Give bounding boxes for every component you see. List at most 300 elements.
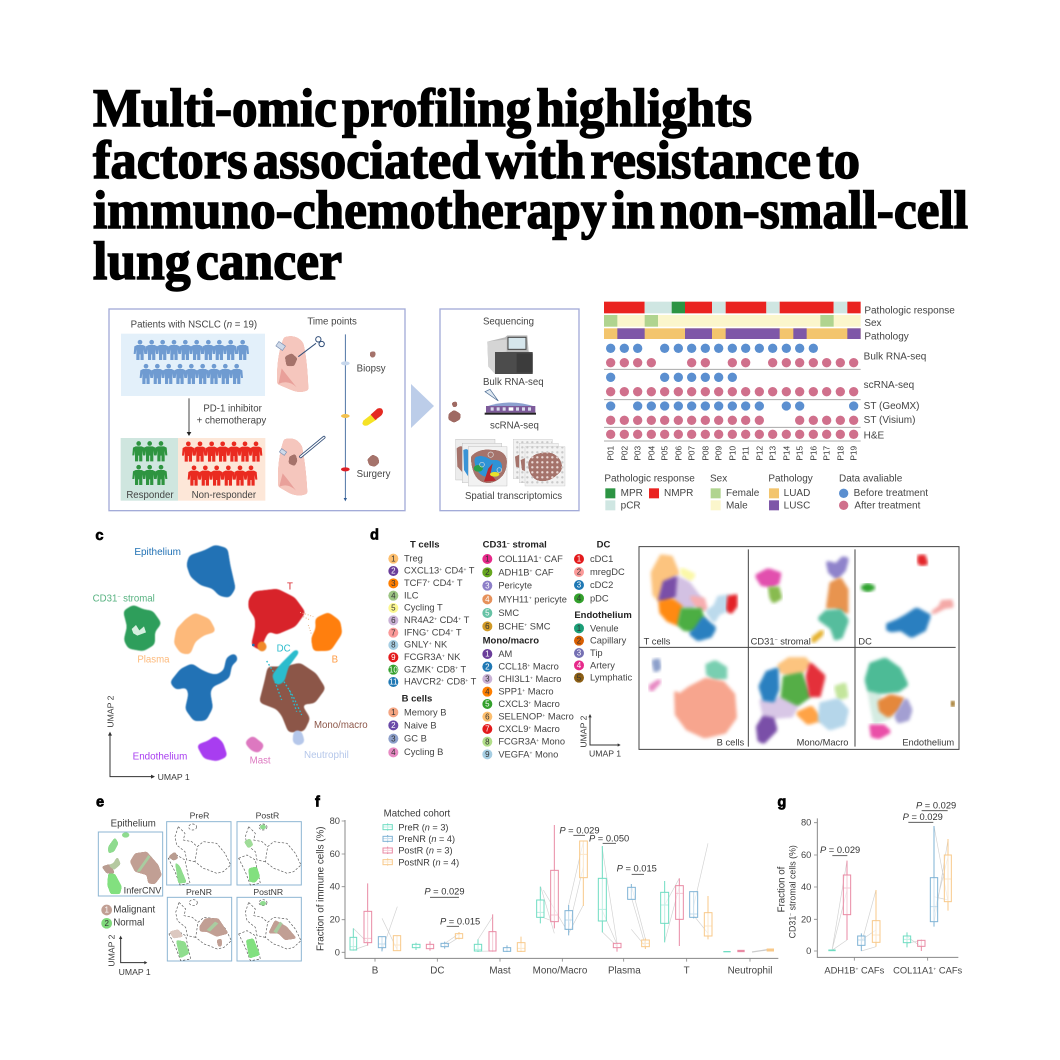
subpanel: CD31- stromal (751, 558, 847, 647)
legend: T cells: CXCL13 (404, 566, 439, 576)
subpanel: epithelium: Epithelium (111, 819, 156, 830)
cluster: CD31- stromal (93, 593, 161, 651)
legend: T cells: NR4A2 (404, 615, 434, 625)
row: sex: Sex (864, 318, 882, 329)
legend: B cells: 3 (391, 734, 396, 743)
legend: T cells: + (431, 666, 434, 672)
cluster: CD31- stromal: CD31 (93, 593, 117, 604)
patient labels: P19 (849, 445, 859, 461)
legend: mono/macro: CHI3L1 (498, 674, 530, 684)
subpanel: DC: DC (858, 637, 872, 647)
legend: T cells: T (468, 677, 477, 687)
biopsy sample: Biopsy (357, 364, 386, 375)
subpanel: PreR (167, 811, 231, 885)
legend: endothelium: Lymphatic (590, 673, 633, 683)
legend: DC (574, 540, 625, 603)
legend: B cells: 1 (391, 708, 396, 717)
legend: mono/macro: 8 (485, 737, 490, 746)
panel d: cell subtype legends (370, 527, 633, 759)
legend: B cells: GC B (404, 734, 427, 744)
legend: mono/macro: Mono (539, 737, 565, 747)
row: sex (604, 315, 882, 329)
axes: + (933, 967, 936, 973)
legend: T cells: FCGR3A (404, 652, 442, 662)
legend: CD31- stromal: ADH1B (498, 567, 529, 577)
row: ST GeoMX dots (606, 401, 920, 412)
axes: + (855, 967, 858, 973)
P values: P = 0.029 (903, 812, 943, 822)
legend: pathologic response: pCR (621, 500, 641, 511)
legend: endothelium: Venule (590, 623, 619, 633)
panel f: immune cell fractions (315, 795, 778, 976)
text: time points: Time points (307, 317, 357, 328)
legend: T cells: T (458, 664, 466, 674)
cluster: mono/macro (259, 663, 368, 732)
non-responder group: Non-responder (192, 490, 257, 501)
grid frame (639, 547, 959, 749)
legend: inferCNV (101, 905, 156, 929)
cluster: T (249, 582, 313, 652)
legend: mono/macro: + (528, 725, 531, 731)
cluster: DC: DC (277, 643, 291, 654)
P values: P = 0.029 (424, 887, 465, 897)
legend: mono/macro: Macro (530, 662, 559, 672)
axes: 20 (801, 914, 811, 924)
legend: CD31- stromal: + (539, 555, 542, 561)
icon: lung surgery (278, 437, 324, 495)
legend: pathology (768, 473, 813, 511)
subpanel: epithelium: InferCNV (124, 885, 162, 895)
cluster: plasma (137, 613, 216, 666)
cluster: CD31- stromal: stromal (120, 593, 155, 604)
legend: mono/macro: 5 (485, 700, 490, 709)
legend: mono/macro: CXCL3 (498, 699, 528, 709)
panel letter g: g (777, 795, 786, 811)
P values: P = 0.029 (916, 800, 956, 810)
legend: endothelium: 1 (577, 624, 582, 633)
legend: T cells: + (452, 579, 455, 585)
legend: T cells: + (429, 641, 432, 647)
legend: CD31- stromal: COL11A1 (498, 554, 539, 564)
legend: mono/macro: 4 (485, 687, 490, 696)
row: H&E dots (606, 430, 885, 442)
legend: data available (839, 473, 928, 511)
legend: T cells: ILC (404, 590, 419, 600)
panel g: stromal cell fractions (776, 795, 963, 975)
legend: B cells: Memory B (404, 707, 447, 717)
patient labels: P14 (781, 445, 791, 461)
axes: Mono/Macro (533, 965, 588, 976)
P values: P = 0.015 (617, 864, 657, 874)
legend: T cells: 2 (391, 567, 396, 576)
patient labels: P07 (687, 445, 697, 461)
patient labels: P18 (835, 445, 845, 461)
legend: mono/macro: CCL18 (498, 662, 527, 672)
legend: T cells: + (450, 629, 453, 635)
legend: B cells: B cells (402, 694, 432, 705)
legend: sex: Female (726, 488, 760, 499)
panel b: data availability heatmap (604, 302, 955, 511)
legend: endothelium (574, 610, 633, 683)
boxes: T (661, 878, 712, 946)
legend: mono/macro: + (542, 713, 545, 719)
legend: inferCNV: Malignant (113, 905, 156, 916)
legend: CD31- stromal: SMC (498, 608, 519, 618)
boxes: plasma (598, 846, 649, 952)
legend: mono/macro: 6 (485, 712, 490, 721)
legend: pathologic response: MPR (621, 488, 643, 499)
legend: T cells: + (442, 653, 445, 659)
title: lung cancer (93, 231, 342, 291)
legend: T cells: + (426, 629, 429, 635)
P values: P = 0.029 (559, 825, 600, 835)
cluster: plasma: Plasma (137, 655, 170, 666)
legend: T cells: CD4 (429, 627, 450, 637)
legend: mono/macro: + (527, 663, 530, 669)
panel: sequencing: Sequencing (483, 317, 534, 328)
legend: mono/macro: 1 (485, 650, 490, 659)
legend: mono/macro: + (529, 751, 532, 757)
legend: CD31- stromal: 2 (485, 568, 490, 577)
legend: endothelium: 5 (577, 673, 582, 682)
legend: CD31- stromal: CAF (542, 554, 563, 564)
row: pathology: Pathology (864, 331, 909, 342)
axes: 40 (330, 882, 340, 892)
patient labels: P06 (673, 445, 683, 461)
axes: Mast (489, 965, 511, 976)
non-responder group (178, 438, 265, 501)
axes: B (372, 965, 379, 976)
axes: UMAP (106, 695, 190, 782)
axes: Fraction of (776, 866, 787, 912)
axes: stromal cells (%) (787, 845, 797, 913)
legend: CD31- stromal: 3 (485, 581, 490, 590)
legend: data available: After treatment (854, 500, 921, 511)
cluster: B (311, 612, 342, 665)
legend: data available: Before treatment (854, 488, 928, 499)
legend: CD31- stromal: pericyte (532, 594, 567, 604)
legend: pathologic response: NMPR (664, 488, 693, 499)
patient labels: P11 (741, 446, 751, 461)
legend: DC: 1 (577, 555, 582, 564)
axes: − (789, 913, 795, 916)
legend: T cells: 10 (389, 665, 398, 674)
legend: endothelium: Capillary (590, 636, 627, 646)
legend: B cells: 2 (391, 721, 396, 730)
legend: T cells: HAVCR2 (404, 677, 441, 687)
legend: CD31- stromal (482, 540, 567, 631)
arrow: treatment: + chemotherapy (197, 415, 266, 426)
legend: DC: DC (597, 540, 611, 551)
panel: sequencing: scRNA-seq (490, 421, 539, 432)
legend: mono/macro: SPP1 (498, 687, 522, 697)
legend: DC: 3 (577, 581, 582, 590)
legend: mono/macro: VEGFA (498, 749, 529, 759)
legend: T cells: T cells (410, 540, 440, 551)
legend: T cells: + (434, 616, 437, 622)
subpanel: DC (858, 556, 952, 647)
legend: endothelium: Artery (590, 660, 615, 670)
icon: spatial slides Visium (513, 439, 565, 486)
icon: drug capsule (362, 408, 383, 426)
legend: mono/macro: SELENOP (498, 712, 542, 722)
icon: scRNA-seq chip (485, 389, 536, 415)
legend: T cells: Treg (404, 553, 423, 563)
axes: DC (430, 965, 444, 976)
row: scRNA-seq dots: scRNA-seq (864, 380, 914, 391)
legend: T cells: CD4 (430, 578, 452, 588)
legend: T cells: Cycling T (404, 603, 443, 613)
legend: CD31- stromal: SMC (527, 621, 551, 631)
axes: Fraction of immune cells (%) (315, 826, 326, 951)
legend: matched cohort: PostNR (n = 4) (398, 857, 459, 867)
subpanel: CD31- stromal: CD31 (751, 637, 775, 647)
panel letter c: c (95, 528, 103, 544)
cluster: mast (245, 736, 271, 766)
legend: matched cohort (383, 809, 459, 867)
P values: P = 0.029 (820, 845, 860, 855)
legend: B cells: 4 (391, 748, 396, 757)
legend: data available: Data avaliable (839, 473, 903, 484)
legend: mono/macro (482, 635, 574, 759)
patient labels: P10 (727, 445, 737, 461)
legend: CD31- stromal: stromal (510, 540, 547, 551)
cluster: endothelium: Endothelium (133, 752, 187, 763)
legend: CD31- stromal: + (524, 623, 527, 629)
legend: mono/macro: + (522, 688, 525, 694)
panel a: study design (109, 309, 579, 511)
legend: mono/macro: CXCL9 (498, 724, 528, 734)
boxes: mono/macro (537, 825, 587, 935)
panel d: subtype UMAP grid (639, 547, 959, 749)
title: factors associated with resistance to (93, 130, 860, 190)
legend: endothelium: 4 (577, 661, 582, 670)
subpanel: PostR: PostR (256, 811, 279, 821)
row: bulk RNA-seq dots (606, 344, 926, 367)
cluster: epithelium lower (170, 653, 238, 721)
legend: T cells: 8 (391, 641, 396, 650)
subpanel: mono/macro: Mono/Macro (797, 737, 849, 747)
legend: CD31- stromal: 6 (485, 622, 490, 631)
row: bulk RNA-seq dots: Bulk RNA-seq (864, 352, 926, 363)
legend: mono/macro: Mono/macro (483, 635, 539, 646)
icon: sequencer (487, 335, 533, 374)
legend: CD31- stromal: CD31 (483, 540, 507, 551)
legend: CD31- stromal: 5 (485, 609, 490, 618)
responder group (121, 438, 178, 501)
row: scRNA-seq dots (606, 373, 914, 396)
subpanel: T cells (644, 556, 736, 647)
patient labels: P02 (619, 445, 629, 461)
axes: CD31 (787, 916, 797, 938)
timeline (341, 334, 350, 501)
legend: T cells: + (439, 567, 442, 573)
legend: T cells (388, 540, 477, 687)
legend: mono/macro: 9 (485, 750, 490, 759)
row: ST GeoMX dots: ST (GeoMX) (864, 401, 920, 412)
legend: B cells (388, 694, 447, 757)
axes: UMAP: UMAP 2 (578, 715, 588, 748)
cluster: mono/macro: Mono/macro (314, 720, 368, 731)
axes: 80 (330, 816, 340, 826)
legend: DC: pDC (590, 593, 609, 603)
icon: tissue samples (448, 401, 461, 423)
biopsy sample (357, 351, 386, 375)
legend: T cells: CD4 (437, 615, 458, 625)
patient labels: P05 (660, 445, 670, 461)
legend: DC: mregDC (590, 567, 625, 577)
legend: mono/macro: 3 (485, 675, 490, 684)
legend: T cells: + (465, 678, 468, 684)
legend: T cells: GNLY (404, 640, 429, 650)
panel letter e: e (96, 795, 104, 811)
legend: mono/macro: 7 (485, 725, 490, 734)
subpanel: PreR: PreR (190, 811, 209, 821)
legend: endothelium: Tip (590, 648, 603, 658)
legend: CD31- stromal: + (529, 569, 532, 575)
subpanel: epithelium (98, 819, 163, 896)
legend: sex: Sex (710, 473, 727, 484)
legend: T cells: NK (432, 640, 448, 650)
title (93, 78, 968, 291)
legend: T cells: CD8 (434, 664, 455, 674)
legend: T cells: 4 (391, 591, 396, 600)
legend: T cells: 6 (391, 616, 396, 625)
row: pathologic response: Pathologic response (864, 306, 955, 317)
patient labels (606, 445, 859, 461)
legend: mono/macro: Macro (531, 724, 560, 734)
arrow: treatment: PD-1 inhibitor (203, 404, 263, 415)
panel c: global UMAP (93, 528, 368, 782)
legend: matched cohort: Matched cohort (384, 809, 451, 820)
boxes: COL11A1 (903, 826, 951, 951)
patient cohort box: Patients with NSCLC (n = 19) (131, 320, 257, 331)
cluster: endothelium (133, 736, 227, 763)
axes: UMAP: UMAP 1 (119, 967, 151, 977)
panel: sequencing: Bulk RNA-seq (483, 377, 544, 388)
icon: spatial slides GeoMx (456, 439, 507, 486)
legend: mono/macro: FCGR3A (498, 737, 536, 747)
legend: T cells: CD4 (442, 566, 463, 576)
subpanel: CD31- stromal: stromal (778, 637, 811, 647)
patient labels: P03 (633, 445, 643, 461)
legend: T cells: 11 (389, 678, 398, 687)
legend: T cells: T (461, 615, 470, 625)
subpanel: T cells: T cells (644, 637, 671, 647)
boxes: B (350, 883, 401, 951)
cluster: DC (267, 643, 302, 715)
cluster: epithelium: Epithelium (134, 547, 181, 558)
legend: T cells: + (458, 616, 461, 622)
P values (820, 800, 956, 856)
icon: lung biopsy (276, 336, 324, 392)
legend: CD31- stromal: 1 (485, 555, 490, 564)
legend: T cells: T (466, 566, 475, 576)
boxes: mast (474, 914, 525, 952)
legend: T cells: + (463, 567, 466, 573)
axes: T (684, 965, 690, 976)
legend: T cells: CD8 (444, 677, 465, 687)
legend: B cells: Naive B (404, 720, 437, 730)
legend: pathology: Pathology (768, 473, 813, 484)
legend: T cells: NK (445, 652, 461, 662)
legend: CD31- stromal: MYH11 (498, 594, 529, 604)
axes (776, 818, 963, 975)
axes: UMAP: UMAP 2 (106, 934, 116, 967)
surgery sample (357, 455, 391, 480)
legend: pathologic response: Pathologic response (604, 473, 695, 484)
axes: 60 (801, 850, 811, 860)
subpanel: B cells (650, 660, 744, 747)
axes: 0 (806, 946, 811, 956)
legend: DC: 2 (577, 568, 582, 577)
cluster: CD31- stromal: − (117, 594, 120, 600)
legend: T cells: 1 (391, 554, 396, 563)
row: pathologic response (604, 302, 955, 317)
legend: mono/macro: + (536, 738, 539, 744)
legend: inferCNV: Normal (113, 918, 144, 929)
arrow: to sequencing (411, 384, 434, 428)
surgery sample: Surgery (357, 469, 391, 480)
legend: endothelium: 3 (577, 649, 582, 658)
subpanel: PostNR (237, 887, 301, 961)
legend: sex: Male (726, 500, 748, 511)
cluster: epithelium (134, 545, 235, 598)
legend: pathology: LUAD (784, 488, 810, 499)
patient labels: P04 (646, 445, 656, 461)
responder group: Responder (126, 490, 174, 501)
row: ST Visium dots: ST (Visium) (864, 415, 915, 426)
subpanel: PreNR: PreNR (186, 887, 212, 897)
legend: endothelium: 2 (577, 636, 582, 645)
subpanel: B cells: B cells (717, 737, 744, 747)
axes: UMAP (578, 714, 621, 759)
panel e: inferCNV UMAPs (96, 795, 301, 977)
row: H&E dots: H&E (864, 431, 885, 442)
axes (315, 816, 778, 976)
paired lines (832, 826, 948, 951)
legend: mono/macro: Macro (531, 699, 560, 709)
subpanel: endothelium (866, 659, 954, 747)
axes: Neutrophil (728, 965, 772, 976)
cluster: neutrophil: Neutrophil (304, 750, 349, 761)
panel letter d: d (370, 527, 379, 543)
axes: UMAP (106, 934, 151, 977)
legend: DC: cDC1 (590, 554, 613, 564)
legend: CD31- stromal: CAF (532, 567, 554, 577)
legend: endothelium: Endothelium (574, 610, 632, 621)
legend: T cells: 3 (391, 579, 396, 588)
panel: sequencing (440, 309, 579, 511)
patient labels: P17 (822, 445, 832, 461)
subpanel: PostR (237, 811, 301, 885)
axes: COL11A1 (893, 965, 933, 975)
legend: B cells: Cycling B (404, 747, 443, 757)
panel letter f: f (315, 795, 320, 811)
axes: ADH1B (824, 965, 855, 975)
legend: T cells: T (454, 578, 463, 588)
legend: pathology: LUSC (784, 500, 810, 511)
boxes: DC (412, 932, 463, 951)
legend: sex (710, 473, 760, 511)
patient labels: P16 (808, 445, 818, 461)
patient labels: P09 (714, 445, 724, 461)
subpanel: endothelium: Endothelium (902, 737, 954, 747)
patient labels: P01 (606, 445, 616, 461)
axes: UMAP: UMAP 1 (158, 772, 190, 782)
boxes: ADH1B (828, 861, 880, 951)
axes: 60 (330, 849, 340, 859)
